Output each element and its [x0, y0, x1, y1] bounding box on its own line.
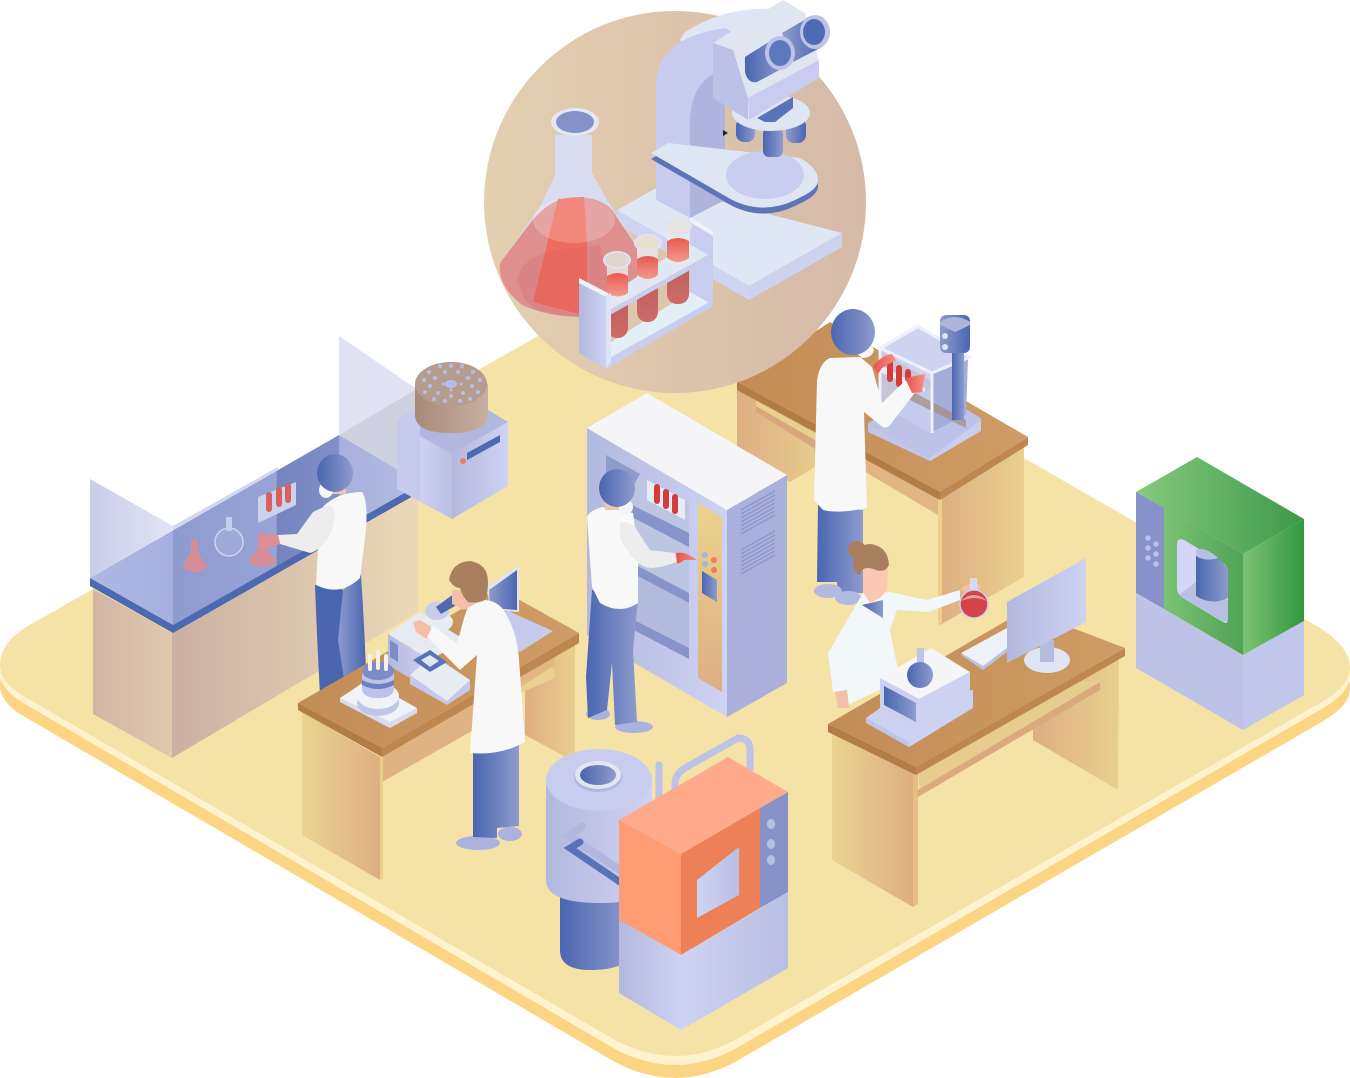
- perforated drum: [415, 362, 488, 433]
- microscope base: [617, 186, 842, 300]
- person lab coat: [814, 357, 917, 512]
- upper tube sections: [604, 218, 691, 299]
- person legs: [315, 575, 366, 695]
- glass mixing cabinet: [868, 315, 981, 461]
- woman neckline: [862, 600, 883, 618]
- microscope head: [713, 0, 819, 120]
- person head: [449, 561, 488, 610]
- cylinder vessel: [546, 749, 652, 970]
- person head: [599, 469, 635, 515]
- floor platform: [0, 268, 1350, 1078]
- person glove: [676, 553, 697, 563]
- rack bottom plate: [608, 292, 713, 362]
- person shoes: [456, 827, 522, 850]
- cabinet control strip: [698, 503, 722, 692]
- cabinet interior shelves: [606, 455, 689, 659]
- left table: [298, 588, 579, 880]
- keyboard: [961, 628, 1007, 670]
- rack shelf: [608, 243, 708, 315]
- orange machine: [619, 738, 788, 1030]
- person shirt: [587, 507, 638, 609]
- front right table: [828, 610, 1125, 907]
- round flask with red liquid: [960, 578, 988, 618]
- cabinet sample rack: [647, 480, 685, 520]
- person at bench: [257, 454, 366, 695]
- small pointer mark: [723, 130, 728, 136]
- balance with flask: [866, 648, 973, 747]
- person shoes: [814, 584, 861, 605]
- back table: [737, 322, 1028, 625]
- person shoes: [586, 708, 653, 733]
- lower tube sections: [607, 262, 689, 338]
- person gloves: [873, 354, 925, 393]
- laptop: [470, 565, 553, 652]
- person lab coat: [427, 600, 525, 754]
- person arm: [620, 522, 677, 568]
- objective lenses: [732, 95, 810, 157]
- person arm: [278, 505, 335, 553]
- person legs: [817, 505, 863, 593]
- person shirt: [316, 492, 366, 590]
- magnified circle background: [484, 11, 866, 393]
- person head: [831, 309, 875, 358]
- person hand: [257, 534, 280, 550]
- bench microscope device: [388, 593, 470, 705]
- microscope in circle: [617, 0, 842, 300]
- dryer machine: [397, 362, 508, 519]
- green machine: [1136, 457, 1304, 730]
- person holding flask: [828, 541, 988, 708]
- woman head: [848, 541, 889, 603]
- monitor: [1007, 558, 1086, 673]
- person at back table: [814, 309, 981, 605]
- small tube rack with red samples: [880, 360, 925, 392]
- person at cabinet: [586, 469, 697, 733]
- person hands: [413, 620, 434, 640]
- person head: [317, 454, 353, 498]
- woman hand: [835, 690, 849, 708]
- cabinet vents: [741, 491, 775, 574]
- person at microscope: [413, 561, 525, 850]
- microscope arm: [656, 9, 800, 218]
- bench glass shields: [90, 336, 415, 578]
- pipes: [659, 738, 750, 818]
- green machine buttons: [1145, 535, 1159, 567]
- conical flask: [500, 108, 640, 317]
- eyepieces: [745, 15, 830, 82]
- left bench: [90, 435, 422, 758]
- rack front rail and left end: [579, 278, 713, 369]
- woman lab coat: [828, 590, 960, 705]
- person legs: [586, 590, 638, 725]
- test tube rack: [579, 217, 713, 369]
- microscope stage: [651, 143, 818, 214]
- green machine window: [1177, 539, 1228, 623]
- person legs: [473, 745, 519, 838]
- bench samples: [182, 482, 296, 572]
- centrifuge on scale: [340, 650, 417, 728]
- storage cabinet: [587, 393, 787, 717]
- rack right end: [690, 217, 713, 305]
